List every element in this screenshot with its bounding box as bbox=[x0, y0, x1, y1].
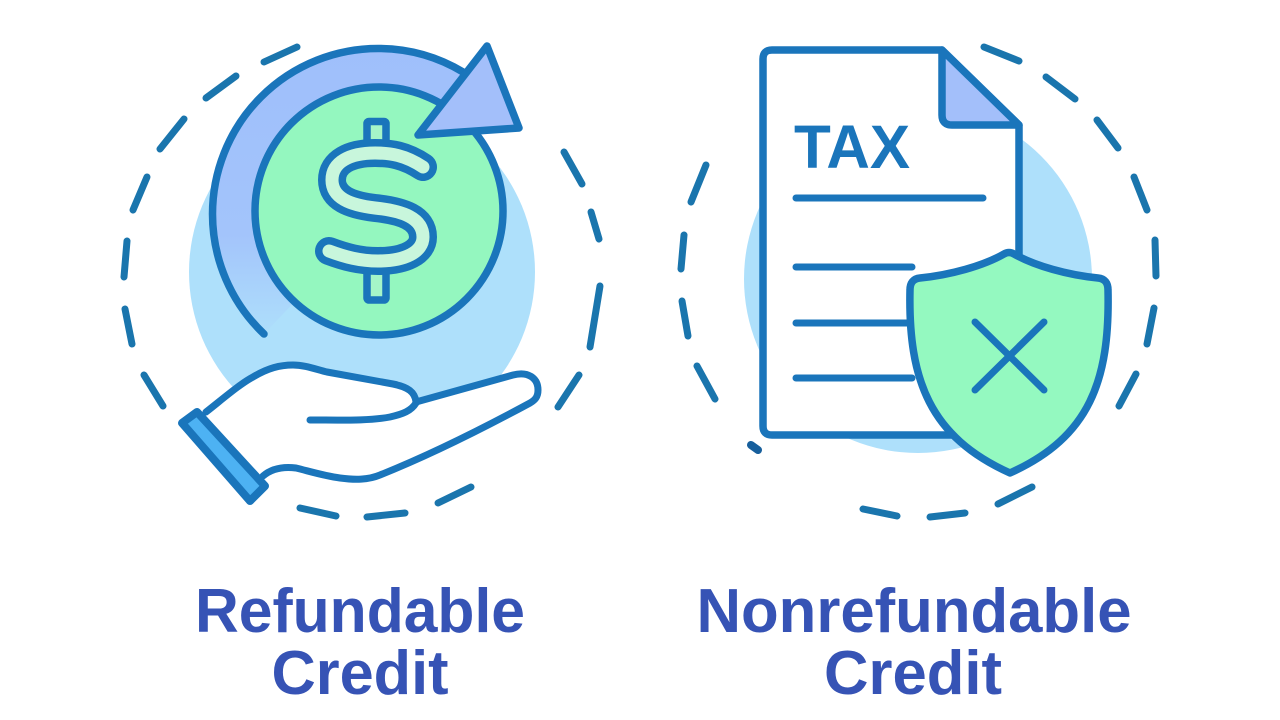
dollar sign bbox=[329, 122, 423, 300]
light blue background circle right bbox=[744, 105, 1092, 453]
heading: Refundable Credit: Credit bbox=[272, 639, 448, 708]
dashed circle right bbox=[681, 47, 1156, 517]
icon: open hand bbox=[182, 365, 538, 501]
heading: Refundable Credit bbox=[195, 577, 525, 708]
circular arrow band bbox=[212, 48, 463, 334]
heading: Refundable Credit: Refundable bbox=[195, 577, 525, 646]
dashed circle left bbox=[124, 47, 600, 517]
TAX label: TAX bbox=[794, 113, 910, 181]
tax document bbox=[763, 50, 1019, 435]
coin with dollar sign bbox=[255, 87, 503, 335]
heading: Nonrefundable Credit: Nonrefundable bbox=[696, 577, 1132, 646]
dark speck bbox=[751, 445, 758, 450]
panel: refundable credit illustration bbox=[124, 46, 600, 517]
heading: Nonrefundable Credit: Credit bbox=[824, 639, 1002, 708]
heading: Nonrefundable Credit bbox=[696, 577, 1132, 708]
icon: shield with x bbox=[910, 252, 1108, 473]
light blue background circle left bbox=[189, 99, 535, 445]
panel: nonrefundable credit illustration bbox=[681, 47, 1156, 517]
arrow head bbox=[418, 46, 519, 135]
